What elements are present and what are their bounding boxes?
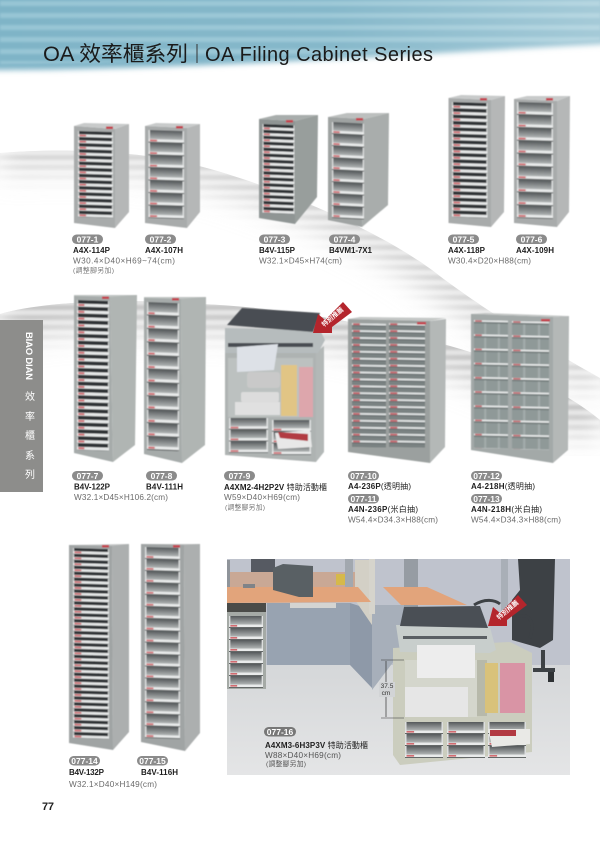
label 077-5: W30.4×D20×H88(cm) xyxy=(448,256,531,266)
cabinet 077-6 xyxy=(514,96,570,227)
label 077-3: B4V-115P xyxy=(259,246,296,255)
side tab: section label xyxy=(0,320,43,492)
label 077-11: 077-11 xyxy=(350,494,377,504)
photo panel 077-16 xyxy=(227,559,570,775)
label 077-12 xyxy=(471,471,535,491)
title xyxy=(43,43,433,66)
label 077-11 xyxy=(348,494,438,524)
background: gray swoosh lower xyxy=(0,301,600,448)
label 077-11: A4N-236P(米白抽) xyxy=(348,504,418,514)
label 077-13: A4N-218H(米白抽) xyxy=(471,504,542,514)
label 077-15 xyxy=(137,756,178,777)
label 077-4: 077-4 xyxy=(334,234,356,244)
background: header band xyxy=(0,0,600,70)
label 077-1: W30.4×D40×H69~74(cm) xyxy=(73,256,175,266)
label 077-12: A4-218H(透明抽) xyxy=(471,481,535,491)
drawers right xyxy=(272,420,312,455)
desks xyxy=(227,587,467,608)
label 077-8: B4V-111H xyxy=(146,482,183,492)
label 077-8 xyxy=(146,471,183,492)
label 077-6: A4X-109H xyxy=(516,246,554,255)
label 077-7: 077-7 xyxy=(77,471,99,481)
printer on cabinet xyxy=(396,606,496,678)
recommendation arrow 077-16 xyxy=(488,595,527,626)
office chair xyxy=(474,559,555,682)
recommendation arrow 077-16: 特別推薦 xyxy=(495,598,521,622)
label 077-1: A4X-114P xyxy=(73,246,111,255)
cabinet 077-2 xyxy=(145,123,200,228)
label 077-14: 077-14 xyxy=(71,756,98,766)
desktop organizer xyxy=(243,564,345,597)
open storage interior xyxy=(228,358,313,417)
label 077-2 xyxy=(145,234,183,255)
under-desk drawer unit xyxy=(227,603,266,689)
mobile cabinet body xyxy=(393,642,532,765)
partition frames xyxy=(227,559,508,619)
page number: 77 xyxy=(42,801,54,813)
label 077-6: 077-6 xyxy=(521,234,543,244)
label 077-4: B4VM1-7X1 xyxy=(329,246,373,255)
recommendation arrow 077-9 xyxy=(313,302,352,333)
label 077-14: B4V-132P xyxy=(69,768,105,777)
label 077-7 xyxy=(72,471,168,502)
label 077-3: W32.1×D45×H74(cm) xyxy=(259,256,342,266)
label 077-1: 077-1 xyxy=(77,234,99,244)
cabinet 077-5 xyxy=(448,95,505,227)
label 077-2: A4X-107H xyxy=(145,246,183,255)
cabinet 077-10 / 077-11 xyxy=(348,317,446,463)
label 077-10 xyxy=(348,471,411,491)
side tab: section label: 櫃 xyxy=(25,429,35,442)
label 077-14: W32.1×D40×H149(cm) xyxy=(69,780,157,789)
label 077-1: (調整腳另加) xyxy=(73,266,114,274)
side tab: section label: 率 xyxy=(25,410,35,423)
label 077-3: 077-3 xyxy=(264,234,286,244)
label 077-10: A4-236P(透明抽) xyxy=(348,481,411,491)
label 077-9: (調整腳另加) xyxy=(225,502,265,512)
label 077-5: 077-5 xyxy=(453,234,475,244)
cabinet 077-7 xyxy=(74,295,137,462)
label 077-9: A4XM2-4H2P2V 特助活動櫃 xyxy=(224,482,327,492)
label 077-10: 077-10 xyxy=(350,471,377,481)
office wall and floor xyxy=(227,559,570,775)
label 077-12: 077-12 xyxy=(473,471,500,481)
side tab: section label: 系 xyxy=(25,449,35,462)
recommendation arrow 077-9: 特別推薦 xyxy=(320,305,346,329)
height dimension: cm xyxy=(382,690,390,697)
label 077-15: 077-15 xyxy=(139,756,166,766)
title: OA 效率櫃系列 xyxy=(43,43,188,66)
cabinet 077-14 xyxy=(69,544,129,750)
cabinet 077-12 / 077-13 xyxy=(471,313,569,463)
cabinet 077-8 xyxy=(144,297,206,463)
label 077-14 xyxy=(69,756,157,789)
label 077-3 xyxy=(259,234,342,266)
cabinet 077-3 xyxy=(259,115,318,224)
label 077-5: A4X-118P xyxy=(448,246,486,255)
label 077-1 xyxy=(72,234,175,274)
label 077-6 xyxy=(516,234,554,255)
label 077-9: W59×D40×H69(cm) xyxy=(224,493,300,502)
cabinet 077-1 xyxy=(74,123,129,228)
label 077-15: B4V-116H xyxy=(141,768,178,777)
side tab: section label: BIAO DIAN xyxy=(23,332,34,380)
label 077-8: 077-8 xyxy=(151,471,173,481)
label 077-7: W32.1×D45×H106.2(cm) xyxy=(74,493,168,502)
label 077-4 xyxy=(329,234,373,255)
label 077-16 xyxy=(264,727,368,768)
side tab: section label: 效 xyxy=(25,390,35,403)
cabinet 077-9 with printer xyxy=(225,308,325,462)
label 077-11: W54.4×D34.3×H88(cm) xyxy=(348,516,438,524)
label 077-16: 077-16 xyxy=(267,727,294,737)
mobile cabinet drawers xyxy=(405,722,530,758)
printer xyxy=(225,308,325,372)
height dimension: 37.5 xyxy=(381,683,394,690)
cabinet 077-4 xyxy=(328,113,389,227)
label 077-13 xyxy=(471,494,561,524)
label 077-16: W88×D40×H69(cm) xyxy=(265,751,341,760)
label 077-5 xyxy=(448,234,531,266)
label 077-13: W54.4×D34.3×H88(cm) xyxy=(471,516,561,524)
background: gray swoosh upper xyxy=(0,150,600,398)
label 077-2: 077-2 xyxy=(150,234,172,244)
title: OA Filing Cabinet Series xyxy=(205,44,433,66)
cabinet 077-15 xyxy=(141,544,200,751)
side tab: section label: 列 xyxy=(25,469,35,481)
label 077-9 xyxy=(224,471,327,512)
label 077-16: (調整腳另加) xyxy=(266,759,306,768)
drawers left xyxy=(229,418,268,453)
label 077-13: 077-13 xyxy=(473,494,500,504)
label 077-7: B4V-122P xyxy=(74,482,111,492)
label 077-16: A4XM3-6H3P3V 特助活動櫃 xyxy=(265,740,368,750)
cabinet body xyxy=(225,346,324,462)
height dimension xyxy=(379,660,404,718)
label 077-9: 077-9 xyxy=(229,471,251,481)
